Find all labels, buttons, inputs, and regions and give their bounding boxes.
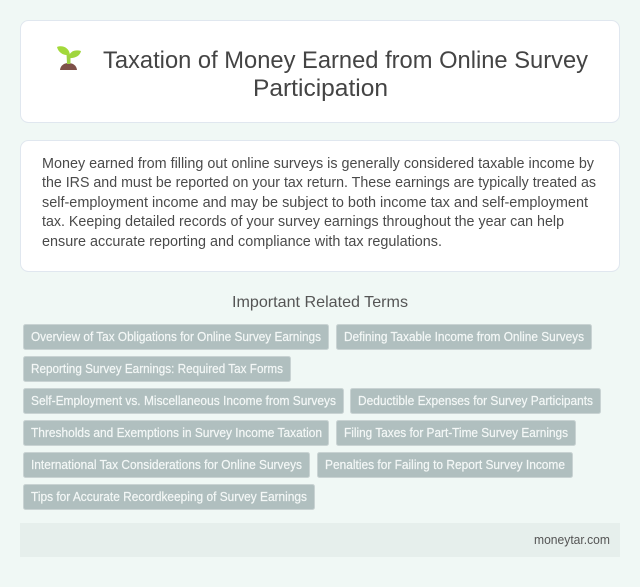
tag [24,484,314,510]
footer bar [20,523,620,557]
tag: Tips for Accurate Recordkeeping of Survey Earnings [31,490,307,504]
tag: Self-Employment vs. Miscellaneous Income from Surveys [31,394,336,408]
tag: Reporting Survey Earnings: Required Tax Forms [31,362,283,376]
summary paragraph: the IRS and must be reported on your tax return. These earnings are typically treated as [42,174,596,191]
tag [336,324,592,350]
tag [24,420,328,446]
tag: Deductible Expenses for Survey Participants [358,394,593,408]
tag [318,452,572,478]
summary paragraph: ensure accurate reporting and compliance with tax regulations. [42,233,442,250]
tag: Defining Taxable Income from Online Surveys [344,330,584,344]
tag [336,420,576,446]
tag [24,388,344,414]
title text: Participation [253,75,388,102]
tag [24,452,310,478]
tag [350,388,600,414]
tag: Penalties for Failing to Report Survey Income [325,458,565,472]
tag [24,356,290,382]
tag [24,324,328,350]
panel: summary card [20,140,620,272]
title text: Taxation of Money Earned from Online Survey [103,47,589,74]
tag: Thresholds and Exemptions in Survey Income Taxation [31,426,322,440]
summary paragraph: self-employment income and may be subject to both income tax and self-employment [42,194,589,211]
summary paragraph: Money earned from filling out online surveys is generally considered taxable income by [42,155,594,172]
heading: related terms: Important Related Terms [232,294,408,311]
icon: sprout [57,46,81,70]
panel: title card [20,20,620,122]
tag list [24,324,600,510]
footer source text: moneytar.com [534,533,610,547]
summary paragraph: tax. Keeping detailed records of your survey earnings throughout the year can help [42,213,564,230]
tag: International Tax Considerations for Online Surveys [31,458,302,472]
tag: Filing Taxes for Part-Time Survey Earnings [344,426,568,440]
tag: Overview of Tax Obligations for Online Survey Earnings [31,330,321,344]
